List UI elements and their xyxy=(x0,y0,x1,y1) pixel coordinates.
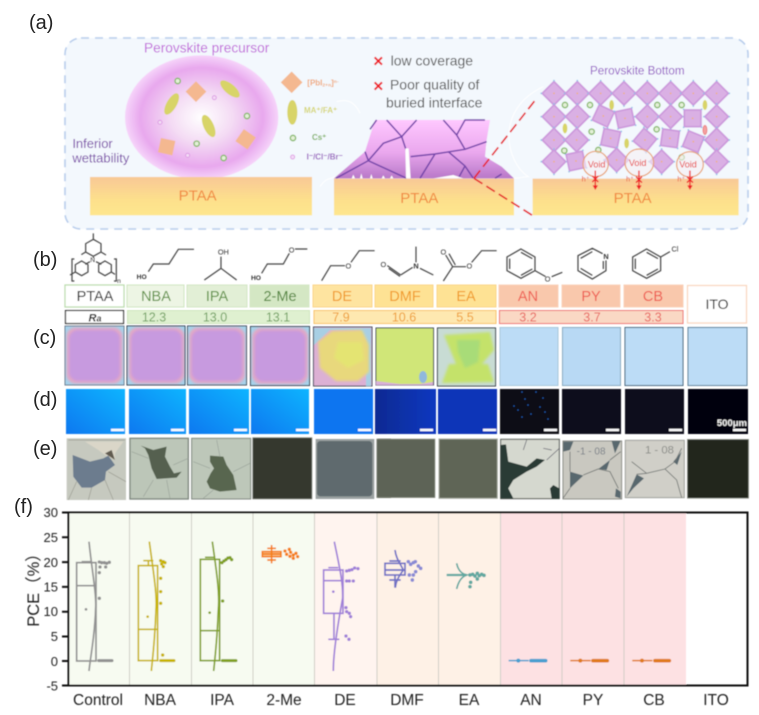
y tick labels: 5 xyxy=(51,629,58,644)
NBA structure xyxy=(137,249,194,281)
label DE xyxy=(313,285,372,307)
DMF box xyxy=(385,550,422,588)
label EA: EA xyxy=(456,289,476,305)
y tick labels: 15 xyxy=(44,580,58,594)
x axis labels: DMF xyxy=(390,692,424,709)
photo PTAA xyxy=(65,326,124,385)
AN structure: O xyxy=(545,275,551,284)
panel: wetting schematic xyxy=(65,38,748,229)
EA structure: O xyxy=(440,247,446,256)
DE box xyxy=(324,542,360,671)
label NBA: NBA xyxy=(141,289,171,305)
photo 2-Me xyxy=(250,326,310,386)
panel label (c): (c) xyxy=(33,327,56,349)
molecular structures right xyxy=(380,245,679,284)
Control box xyxy=(77,542,112,671)
x axis labels: CB xyxy=(643,692,665,709)
NBA structure: HO xyxy=(137,274,147,281)
left data groups xyxy=(77,542,360,671)
coverage notes: buried interface xyxy=(386,95,483,111)
DMF structure: N xyxy=(413,261,419,270)
panel label (e): (e) xyxy=(33,438,57,460)
y tick labels: 30 xyxy=(44,505,58,520)
panel label (a): (a) xyxy=(29,12,53,34)
row d: fluorescence micrographs xyxy=(66,389,748,434)
micrograph IPA xyxy=(189,389,249,434)
x axis labels: AN xyxy=(520,692,542,709)
AN data xyxy=(509,659,546,662)
legend: [PbI xyxy=(307,78,322,87)
group background bands xyxy=(68,512,686,686)
micrograph DE xyxy=(314,389,373,434)
PTAA structure xyxy=(70,233,121,285)
photo NBA xyxy=(127,326,186,385)
PTAA layer right: PTAA xyxy=(614,190,652,207)
coverage notes: Poor quality of xyxy=(390,76,480,92)
Ra values carbonyl group: 5.5 xyxy=(456,310,474,324)
micrograph NBA xyxy=(129,389,186,434)
peel photo DMF body xyxy=(377,439,435,498)
cracked perovskite film xyxy=(334,120,514,178)
CB data xyxy=(632,659,669,662)
label DMF xyxy=(375,285,433,307)
Ra values hydroxyl group xyxy=(128,310,310,324)
Ra label: Ra xyxy=(89,312,101,324)
PTAA layer left: PTAA xyxy=(179,188,217,205)
label IPA xyxy=(187,285,247,307)
droplet heading: Perovskite precursor xyxy=(144,40,270,55)
droplet contents xyxy=(158,77,256,161)
y tick labels: 20 xyxy=(44,555,58,570)
middle and right schematics xyxy=(320,52,739,216)
peel photo EA xyxy=(439,439,497,498)
right data groups xyxy=(385,550,669,662)
photo AN xyxy=(500,328,558,386)
AN structure xyxy=(507,249,562,284)
Ra values carbonyl group: 10.6 xyxy=(392,310,416,324)
voids with blocked holes: h⁺ xyxy=(626,175,634,184)
label ITO: ITO xyxy=(705,296,729,312)
peel photo AN xyxy=(501,439,559,499)
label 2-Me xyxy=(250,285,309,307)
voids with blocked holes: Void xyxy=(629,158,646,168)
y axis title: PCE（%） xyxy=(24,545,43,627)
Ra values hydroxyl group: 13.0 xyxy=(203,310,227,324)
PTAA layer middle: PTAA xyxy=(400,190,438,207)
PY data xyxy=(570,659,607,662)
label PTAA: PTAA xyxy=(77,289,114,305)
PTAA layer left xyxy=(90,177,312,215)
legend: I⁻/Cl⁻/Br⁻ xyxy=(307,152,343,161)
roughness row xyxy=(66,310,683,324)
peel photo PY: -1 - 08 xyxy=(577,446,606,457)
2-Me structure xyxy=(251,245,307,282)
voids with blocked holes: h⁺ xyxy=(677,175,685,184)
chart: PCE box plot xyxy=(24,505,748,709)
row e: peeled device photographs left xyxy=(67,438,391,500)
label CB xyxy=(624,285,683,307)
micrograph 2-Me xyxy=(251,389,309,434)
photo IPA xyxy=(188,326,246,385)
x axis labels: Control xyxy=(73,692,123,709)
label AN: AN xyxy=(518,289,538,305)
label DMF: DMF xyxy=(389,289,421,305)
inferior wettability note: Inferior xyxy=(72,136,113,151)
NBA box xyxy=(138,542,174,671)
photo EA xyxy=(438,328,496,386)
DMF structure xyxy=(380,247,433,276)
voids with blocked holes: h⁺ xyxy=(582,175,590,184)
2-Me structure: O xyxy=(289,245,295,254)
voids with blocked holes: Void xyxy=(679,159,697,169)
row c: film photographs xyxy=(65,326,747,386)
PTAA layer middle xyxy=(334,179,514,215)
EA structure xyxy=(440,247,497,281)
peel photo PTAA xyxy=(67,438,126,500)
legend: Cs⁺ xyxy=(312,133,326,142)
IPA structure: OH xyxy=(218,248,229,257)
photo ITO xyxy=(688,328,747,386)
peel photo NBA xyxy=(130,438,188,499)
micrograph PY xyxy=(562,389,621,434)
Ra values carbonyl group: 7.9 xyxy=(332,310,350,324)
y tick labels: 0 xyxy=(51,654,58,669)
legend: MA⁺/FA⁺ xyxy=(304,106,337,115)
scale bars xyxy=(111,429,746,431)
x axis labels: PY xyxy=(583,692,603,709)
PY structure xyxy=(578,248,609,279)
peel photo PY xyxy=(563,441,622,499)
label PY xyxy=(562,285,620,307)
Ra values hydroxyl group: 13.1 xyxy=(266,310,290,324)
panel label (f): (f) xyxy=(14,496,33,518)
micrograph CB xyxy=(625,389,684,434)
PTAA layer right xyxy=(533,179,739,215)
label PTAA xyxy=(65,285,124,307)
label DE: DE xyxy=(332,289,352,305)
y tick labels: 25 xyxy=(44,530,58,545)
y tick labels: 10 xyxy=(44,604,58,619)
peel photo CB xyxy=(625,440,684,498)
peel photo 2-Me xyxy=(253,438,312,499)
y tick labels: -5 xyxy=(46,678,58,694)
PTAA structure: N xyxy=(90,257,95,264)
label PY: PY xyxy=(581,289,601,305)
CB structure: Cl xyxy=(672,245,679,254)
micrograph EA xyxy=(438,389,497,434)
x axis labels: ITO xyxy=(703,692,729,709)
photo DE xyxy=(314,327,372,386)
micrograph AN xyxy=(500,389,559,434)
droplet body xyxy=(125,55,278,179)
Ra values carbonyl group xyxy=(314,310,496,324)
photo DMF xyxy=(376,328,434,385)
legend xyxy=(281,71,343,161)
photo PY xyxy=(562,328,620,386)
label 2-Me: 2-Me xyxy=(263,289,297,305)
label ITO xyxy=(688,286,746,323)
coverage notes: low coverage xyxy=(391,52,473,68)
label EA xyxy=(437,285,496,307)
PY structure: N xyxy=(603,252,609,261)
inferior wettability note: wettability xyxy=(71,150,130,165)
decorative wisp xyxy=(320,87,543,187)
precursor droplet xyxy=(71,40,343,215)
label CB: CB xyxy=(643,289,663,305)
legend: n- xyxy=(334,79,339,85)
voids with blocked holes: Void xyxy=(588,159,605,169)
x axis labels: DE xyxy=(334,692,356,709)
label AN xyxy=(499,285,558,307)
voids with blocked holes xyxy=(582,149,703,190)
label NBA xyxy=(127,285,184,307)
peel photo ITO xyxy=(687,439,749,498)
legend: 2+n xyxy=(322,83,331,89)
plot frame and y ticks xyxy=(62,512,748,686)
x axis labels: 2-Me xyxy=(266,692,302,709)
legend: ] xyxy=(331,78,334,87)
PTAA structure: n xyxy=(117,278,121,285)
2-Me structure: HO xyxy=(251,275,261,282)
EA structure: O xyxy=(466,261,472,270)
panel label (d): (d) xyxy=(33,389,57,411)
Ra values aromatic group: 3.2 xyxy=(519,310,537,324)
DMF structure: O xyxy=(380,260,386,269)
micrograph DMF xyxy=(375,389,436,434)
Ra label xyxy=(66,310,124,324)
zoom dashed lines xyxy=(474,98,537,216)
IPA structure xyxy=(204,248,237,280)
IPA box xyxy=(200,542,236,671)
Ra values aromatic group: 3.7 xyxy=(583,310,601,324)
perovskite crystal lattice xyxy=(540,79,731,176)
photo CB xyxy=(625,328,683,386)
Ra values aromatic group: 3.3 xyxy=(644,310,662,324)
micrograph ITO xyxy=(688,389,748,434)
x axis labels: IPA xyxy=(210,692,235,709)
x axis labels: NBA xyxy=(144,692,177,709)
CB structure xyxy=(633,245,679,278)
panel label (b): (b) xyxy=(33,249,57,271)
solvent label row xyxy=(65,285,746,323)
DE structure xyxy=(322,251,375,281)
heading: perovskite bottom: Perovskite Bottom xyxy=(590,64,685,77)
DE structure: O xyxy=(345,261,351,270)
schematic background xyxy=(65,38,748,229)
row e: peeled device photographs right xyxy=(377,439,749,499)
micrograph PTAA xyxy=(66,389,125,434)
peel photo CB: 1 - 08 xyxy=(645,444,674,456)
EA box xyxy=(447,563,486,589)
coverage notes xyxy=(375,52,483,111)
Ra values hydroxyl group: 12.3 xyxy=(142,310,166,324)
label IPA: IPA xyxy=(206,289,228,305)
2-Me box xyxy=(262,545,299,563)
scale label: 500μm xyxy=(717,418,747,429)
Ra values aromatic group xyxy=(500,310,683,324)
x axis labels: EA xyxy=(459,692,480,709)
peel photo DE xyxy=(316,439,374,499)
peel photo IPA xyxy=(192,438,251,499)
peel photo DMF xyxy=(378,439,391,498)
molecular structures left xyxy=(70,233,375,285)
